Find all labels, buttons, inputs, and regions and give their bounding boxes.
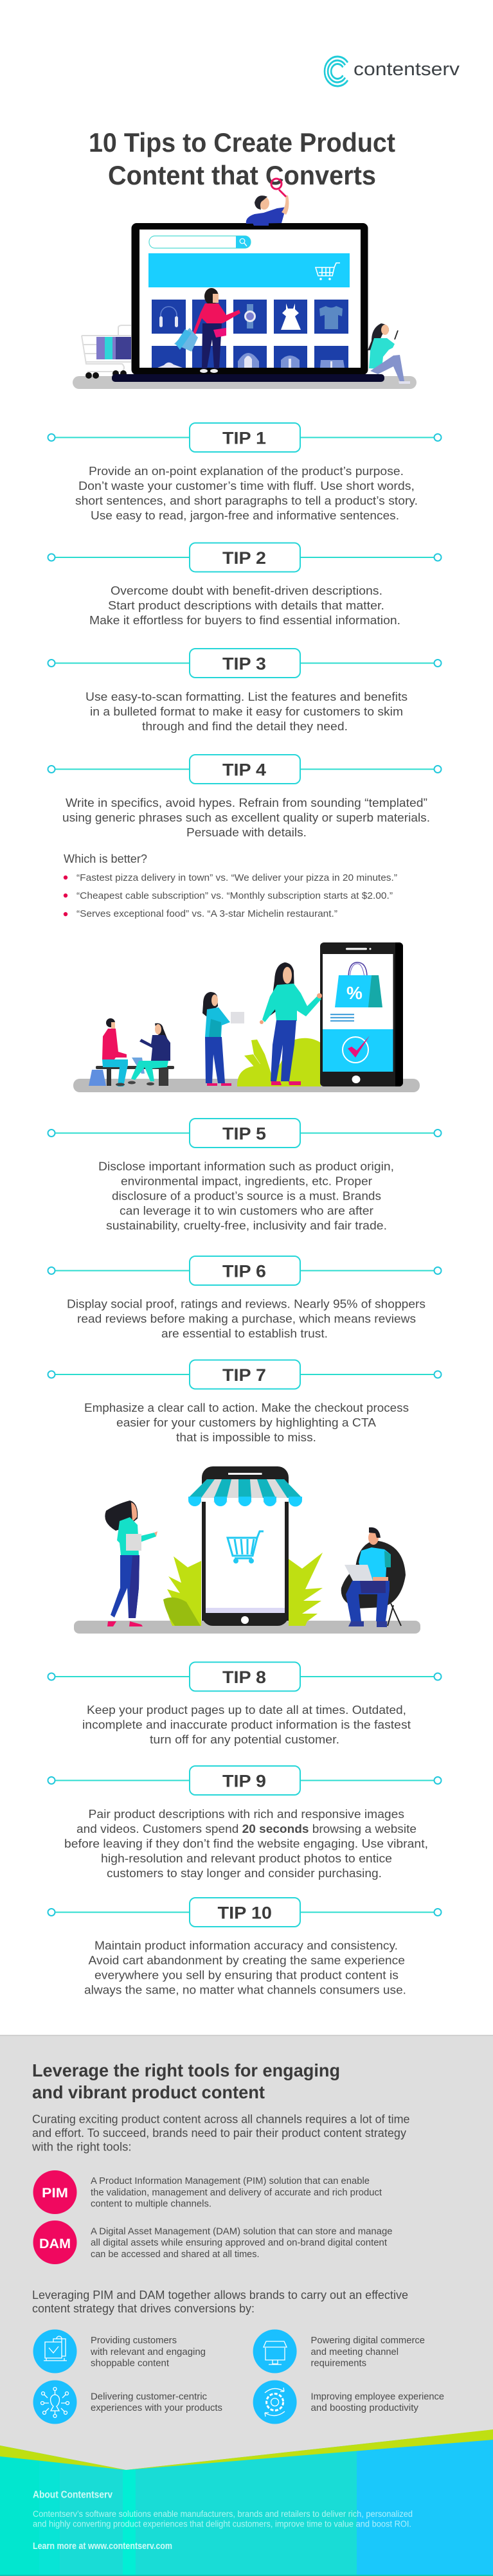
title: 10 Tips to Create Product — [89, 127, 395, 158]
tip 9 text: and videos. Customers spend 20 seconds browsing a website — [76, 1823, 417, 1835]
man on chair with laptop — [341, 1527, 406, 1627]
tip 9 text: Pair product descriptions with rich and responsive images — [89, 1808, 404, 1821]
logo: contentserv: contentserv — [354, 59, 460, 80]
search bar — [149, 236, 251, 248]
tip 5: TIP 5 — [222, 1124, 266, 1143]
tip 3 text: in a bulleted format to make it easy for customers to skim — [90, 705, 403, 718]
plants — [163, 1553, 323, 1626]
tip 1 — [48, 423, 441, 452]
product icons — [157, 303, 345, 368]
illustration: phone storefront — [74, 1466, 420, 1634]
phone — [202, 1466, 289, 1626]
tip 3: TIP 3 — [222, 654, 266, 674]
benefit: employee productivity: Improving employee experience — [311, 2391, 444, 2402]
leveraging paragraph: content strategy that drives conversions by: — [32, 2302, 255, 2315]
tip 6 text — [67, 1297, 426, 1340]
tip 4: TIP 4 — [222, 760, 266, 779]
accent stripe — [0, 2429, 493, 2470]
illustration: people shopping beside phone — [73, 942, 420, 1092]
tip 7: TIP 7 — [222, 1365, 266, 1385]
tip 4 — [48, 755, 441, 784]
tip 5 text: Disclose important information such as product origin, — [98, 1160, 394, 1173]
tip 8 text: Keep your product pages up to date all at times. Outdated, — [87, 1704, 406, 1716]
tip 4 text: Persuade with details. — [186, 826, 307, 839]
tip 10 text — [84, 1939, 406, 1997]
title: Content that Converts — [108, 160, 376, 190]
tip 2 text — [89, 584, 400, 627]
benefit: customer-centric — [33, 2380, 222, 2424]
tip 3 text: through and find the detail they need. — [142, 720, 348, 733]
tip 9 text: customers to stay longer and consider purchasing. — [107, 1867, 382, 1880]
shopping bag with percent: % — [346, 983, 363, 1003]
tip 3 — [48, 649, 441, 678]
PIM description: A Product Information Management (PIM) solution that can enable — [91, 2175, 370, 2186]
tip 10 text: Maintain product information accuracy and consistency. — [94, 1939, 398, 1952]
tip 9: TIP 9 — [222, 1772, 266, 1791]
person with magnifier — [246, 179, 289, 226]
leveraging paragraph — [32, 2289, 408, 2315]
check mark — [343, 1036, 370, 1063]
tip 8 text: turn off for any potential customer. — [150, 1733, 339, 1746]
tip 9 text: before leaving if they don’t find the website engaging. Use vibrant, — [64, 1837, 428, 1850]
tip 8 text: incomplete and inaccurate product information is the fastest — [82, 1718, 411, 1731]
woman with tablet — [202, 992, 244, 1086]
phone — [320, 942, 403, 1086]
PIM description: content to multiple channels. — [91, 2199, 211, 2209]
panel intro: and effort. To succeed, brands need to pair their product content strategy — [32, 2127, 406, 2139]
benefit: shoppable content: shoppable content — [91, 2358, 170, 2368]
PIM badge: PIM — [42, 2186, 68, 2201]
tip 5 text: sustainability, cruelty-free, inclusivity and fair trade. — [106, 1219, 387, 1232]
PIM description — [91, 2175, 382, 2209]
tip 3 text: Use easy-to-scan formatting. List the features and benefits — [85, 690, 408, 703]
benefit: digital commerce: and meeting channel — [311, 2346, 399, 2357]
tip 3 text — [85, 690, 408, 733]
tip 9 text — [64, 1808, 428, 1880]
benefit: digital commerce: requirements — [311, 2358, 366, 2368]
laptop — [112, 223, 384, 382]
tip 2 text: Overcome doubt with benefit-driven descriptions. — [111, 584, 382, 597]
DAM description: can be accessed and shared at all times. — [91, 2249, 260, 2260]
tip 7 text: Emphasize a clear call to action. Make the checkout process — [84, 1401, 409, 1414]
about contentserv: Learn more at www.contentserv.com — [33, 2541, 172, 2552]
tip 1 text: Don’t waste your customer’s time with fluff. Use short words, — [78, 480, 415, 492]
bullet comparison list: “Cheapest cable subscription” vs. “Monthly subscription starts at $2.00.” — [76, 890, 393, 901]
tip 6 text: are essential to establish trust. — [161, 1327, 328, 1340]
tip 4 text: Write in specifics, avoid hypes. Refrain from sounding “templated” — [66, 797, 427, 809]
tip 1 text: Use easy to read, jargon-free and informative sentences. — [91, 509, 399, 522]
tip 6 — [48, 1256, 441, 1285]
benefit: digital commerce: Powering digital commerce — [311, 2335, 425, 2346]
tip 10 text: always the same, no matter what channels consumers use. — [84, 1984, 406, 1997]
benefit: shoppable content: Providing customers — [91, 2335, 177, 2346]
benefit: customer-centric: experiences with your products — [91, 2402, 222, 2413]
tip 2 — [48, 543, 441, 572]
illustration: laptop storefront with shoppers — [73, 179, 417, 389]
panel: leverage tools — [0, 2035, 493, 2470]
panel intro: Curating exciting product content across all channels requires a lot of time — [32, 2112, 410, 2125]
PIM badge — [33, 2170, 77, 2214]
DAM description: A Digital Asset Management (DAM) solution that can store and manage — [91, 2226, 392, 2237]
tip 5 text — [98, 1160, 394, 1232]
plant — [237, 1038, 321, 1086]
bullet comparison list: “Serves exceptional food” vs. “A 3-star Michelin restaurant.” — [76, 908, 337, 919]
benefit: employee productivity: and boosting productivity — [311, 2402, 419, 2413]
panel heading: and vibrant product content — [32, 2082, 265, 2102]
tip 6 text: Display social proof, ratings and reviews. Nearly 95% of shoppers — [67, 1297, 426, 1310]
DAM description — [91, 2226, 392, 2260]
tip 1: TIP 1 — [222, 428, 266, 447]
benefit: shoppable content: with relevant and engaging — [90, 2346, 206, 2357]
shopping bag with percent — [330, 962, 382, 1021]
benefit: digital commerce — [253, 2330, 425, 2373]
tip 8 text — [82, 1704, 411, 1746]
about contentserv: About Contentserv — [33, 2489, 112, 2501]
tip 10 text: everywhere you sell by ensuring that product content is — [94, 1968, 399, 1981]
tip 8: TIP 8 — [222, 1668, 266, 1687]
awning — [188, 1479, 302, 1621]
tip 1 text: short sentences, and short paragraphs to tell a product’s story. — [75, 494, 418, 507]
tip 8 — [48, 1662, 441, 1691]
woman sitting with phone — [368, 323, 410, 384]
tip 2 text: Start product descriptions with details that matter. — [108, 599, 384, 612]
tip 6 text: read reviews before making a purchase, which means reviews — [77, 1313, 416, 1326]
tip 10: TIP 10 — [217, 1903, 272, 1922]
title — [89, 127, 395, 190]
panel heading — [32, 2060, 340, 2102]
tip 1 text — [75, 465, 418, 522]
tip 7 — [48, 1360, 441, 1389]
tip 10 — [48, 1898, 441, 1927]
tip 7 text — [84, 1401, 409, 1444]
panel intro — [31, 2112, 410, 2154]
about contentserv: and highly converting product experiences that delight customers, improve time to value and boost ROI. — [33, 2519, 411, 2529]
tip 4 text — [62, 797, 430, 839]
shopping cart — [82, 325, 131, 379]
product tiles — [152, 300, 348, 368]
benefit: customer-centric: Delivering customer-centric — [91, 2391, 207, 2402]
logo: contentserv — [325, 57, 460, 86]
banner with cart icon — [148, 253, 350, 287]
benefit: employee productivity — [253, 2380, 444, 2424]
tip 4 text: using generic phrases such as excellent quality or superb materials. — [62, 811, 430, 824]
DAM badge — [33, 2220, 77, 2264]
panel heading: Leverage the right tools for engaging — [32, 2060, 340, 2080]
woman pointing at phone — [260, 962, 322, 1085]
DAM badge: DAM — [39, 2237, 71, 2251]
leveraging paragraph: Leveraging PIM and DAM together allows brands to carry out an effective — [32, 2289, 408, 2301]
tip 7 text: that is impossible to miss. — [176, 1431, 316, 1444]
tip 2: TIP 2 — [222, 548, 266, 568]
tip 9 — [48, 1766, 441, 1795]
about contentserv — [33, 2489, 413, 2552]
tip 5 text: environmental impact, ingredients, etc. Proper — [121, 1175, 372, 1188]
benefit: shoppable content — [33, 2330, 206, 2373]
tip 7 text: easier for your customers by highlighting a CTA — [116, 1416, 376, 1429]
tip 1 text: Provide an on-point explanation of the product’s purpose. — [89, 465, 404, 478]
tip 10 text: Avoid cart abandonment by creating the same experience — [89, 1954, 405, 1967]
cart icon — [228, 1531, 264, 1562]
tip 5 text: can leverage it to win customers who are after — [120, 1205, 373, 1218]
about contentserv: Contentserv’s software solutions enable manufacturers, brands and retailers to deliver rich, personalized — [33, 2508, 413, 2519]
footer colour bands — [0, 2436, 493, 2576]
PIM description: the validation, management and delivery of accurate and rich product — [91, 2187, 382, 2198]
bullet comparison list — [64, 872, 397, 919]
bench with seated women — [89, 1018, 174, 1086]
tip 2 text: Make it effortless for buyers to find essential information. — [89, 614, 400, 627]
tip 6: TIP 6 — [222, 1261, 266, 1281]
DAM description: all digital assets while ensuring approved and on-brand digital content — [91, 2237, 388, 2248]
tip 5 text: disclosure of a product’s source is a must. Brands — [112, 1189, 381, 1202]
panel intro: with the right tools: — [31, 2141, 131, 2154]
woman with clipboard — [105, 1500, 157, 1626]
which is better question: Which is better? — [64, 852, 147, 865]
tip 9 text: high-resolution and relevant product photos to entice — [101, 1852, 392, 1865]
woman shopper — [174, 288, 240, 373]
bullet comparison list: “Fastest pizza delivery in town” vs. “We deliver your pizza in 20 minutes.” — [76, 872, 397, 883]
tip 5 — [48, 1119, 441, 1148]
